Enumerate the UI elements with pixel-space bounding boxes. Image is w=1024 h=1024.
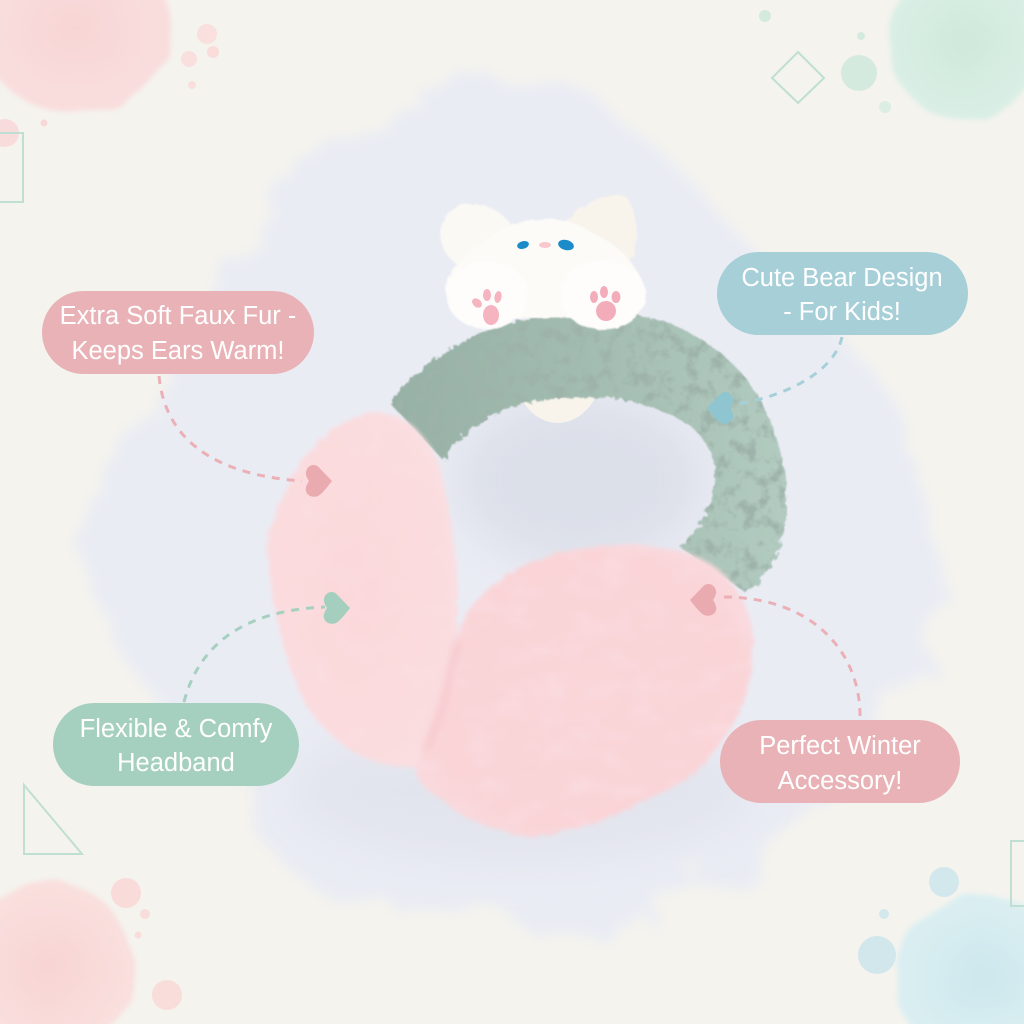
callout: cute bear design: [717, 252, 968, 335]
icon: pink heart marker left pad: [306, 465, 332, 497]
bear back tab under headband: [522, 394, 597, 423]
callout: extra soft faux fur: [42, 291, 314, 374]
callout: perfect winter accessory: [720, 720, 960, 803]
corner watercolor: top left: [0, 0, 219, 147]
icon: blue heart marker on headband: [707, 392, 733, 424]
callout: perfect winter accessory: Accessory!: [778, 767, 902, 795]
right paw pads: [590, 286, 620, 321]
right ear pad: [417, 545, 753, 837]
bear paws: [446, 261, 528, 329]
callout: cute bear design: - For Kids!: [783, 298, 901, 326]
connector: headband to left pad: [184, 607, 325, 702]
corner watercolor: bottom left: [0, 878, 182, 1024]
left ear pad: [267, 413, 457, 767]
callout: perfect winter accessory: Perfect Winter: [759, 732, 921, 760]
bear ears: [441, 204, 520, 275]
bear nose: [539, 242, 551, 248]
soft product shadow: [290, 720, 750, 860]
corner watercolor: top right: [759, 0, 1024, 120]
lavender watercolor blotch: [85, 84, 941, 945]
fold shading between pads: [425, 640, 458, 750]
soft shadow inside headband: [455, 395, 705, 565]
callout: extra soft faux fur: Keeps Ears Warm!: [71, 337, 285, 365]
callout: cute bear design: Cute Bear Design: [741, 264, 943, 292]
callout: extra soft faux fur: Extra Soft Faux Fur -: [60, 302, 296, 330]
white bear toy: [441, 195, 646, 330]
bear eyes: [516, 238, 575, 252]
bear head and body: [446, 219, 645, 318]
connector: fur to left pad: [159, 376, 302, 481]
earmuffs product: [267, 195, 787, 837]
connector: winter accessory to right pad: [718, 597, 860, 716]
left paw pads: [470, 289, 502, 325]
icon: pink heart marker right pad: [690, 584, 716, 616]
connector: bear design to headband: [738, 337, 842, 404]
corner watercolor: bottom right: [858, 867, 1024, 1024]
callout: flexible headband: [53, 703, 299, 786]
callout: flexible headband: Headband: [117, 749, 235, 777]
callout: flexible headband: Flexible & Comfy: [80, 715, 273, 743]
green fuzzy headband: [390, 313, 787, 592]
icon: green heart marker: [324, 592, 350, 624]
